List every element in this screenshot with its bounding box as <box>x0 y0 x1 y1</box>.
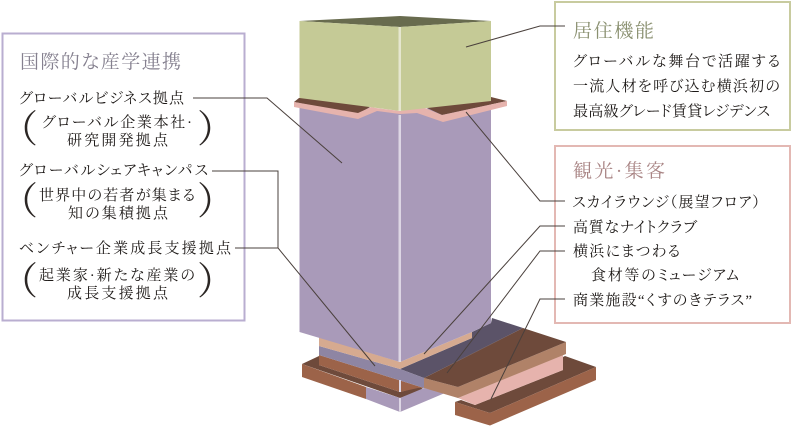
lower right plate <box>455 356 596 426</box>
text: description: 最高級グレード賃貸レジデンス <box>573 102 770 120</box>
panel: tourism <box>555 146 790 323</box>
leader lines <box>193 26 565 399</box>
brown terrace plate top <box>424 328 566 387</box>
text: food museum: 横浜にまつわる <box>573 242 680 260</box>
text: description: 一流人材を呼び込む横浜初の <box>573 77 780 95</box>
panel: residential <box>555 2 790 130</box>
text: food museum: 食材等のミュージアム <box>591 267 739 284</box>
heading: 観光·集客 <box>573 160 665 182</box>
lower stripe <box>399 380 401 392</box>
brown terrace plate side <box>424 342 566 398</box>
text: global business detail: グローバル企業本社· <box>42 114 192 131</box>
green roof top <box>300 16 491 27</box>
text: global business detail: ） <box>197 98 235 153</box>
text: share campus detail: ） <box>197 170 235 225</box>
brown floor band <box>294 97 507 115</box>
text: share campus detail: 世界中の若者が集まる <box>39 186 195 204</box>
text: description: グローバルな舞台で活躍する <box>573 53 780 70</box>
base center stripe <box>399 398 401 412</box>
text: share campus detail: （ <box>0 170 38 225</box>
text: description <box>573 53 780 120</box>
text: global business detail: （ <box>0 98 38 153</box>
text: share campus detail: 知の集積拠点 <box>68 204 169 222</box>
base lavender block <box>366 387 445 412</box>
text: venture detail <box>0 250 235 305</box>
slate terrace <box>400 318 523 378</box>
pink floor band <box>294 101 507 122</box>
panel: international collaboration <box>0 34 244 320</box>
building illustration <box>294 16 596 426</box>
text: venture support base: ベンチャー企業成長支援拠点 <box>19 239 232 257</box>
text: food museum <box>573 242 739 284</box>
heading: 国際的な産学連携 <box>20 51 181 73</box>
heading: 居住機能 <box>573 20 654 42</box>
text: share campus detail <box>0 170 235 225</box>
text: global business detail <box>0 98 235 153</box>
text: night club: 高質なナイトクラブ <box>573 218 697 236</box>
lower left plate <box>302 356 424 399</box>
pink terrace plate <box>458 355 563 405</box>
text: global share campus: グローバルシェアキャンパス <box>19 162 208 179</box>
tan podium band <box>319 332 472 369</box>
brown podium band <box>319 355 424 392</box>
text: global business detail: 研究開発拠点 <box>67 131 169 149</box>
text: sky lounge: スカイラウンジ（展望フロア） <box>572 193 760 211</box>
green block center stripe <box>398 27 401 111</box>
gray podium band <box>319 346 424 388</box>
green residential block <box>300 21 491 111</box>
tower center stripe <box>398 115 401 362</box>
text: venture detail: （ <box>0 250 38 305</box>
text: venture detail: 成長支援拠点 <box>67 284 169 302</box>
lavender tower <box>300 98 491 362</box>
text: commercial facility: 商業施設“くすのきテラス” <box>573 291 752 309</box>
text: global business base: グローバルビジネス拠点 <box>19 89 185 107</box>
text: venture detail: ） <box>197 250 235 305</box>
text: venture detail: 起業家·新たな産業の <box>39 266 195 284</box>
